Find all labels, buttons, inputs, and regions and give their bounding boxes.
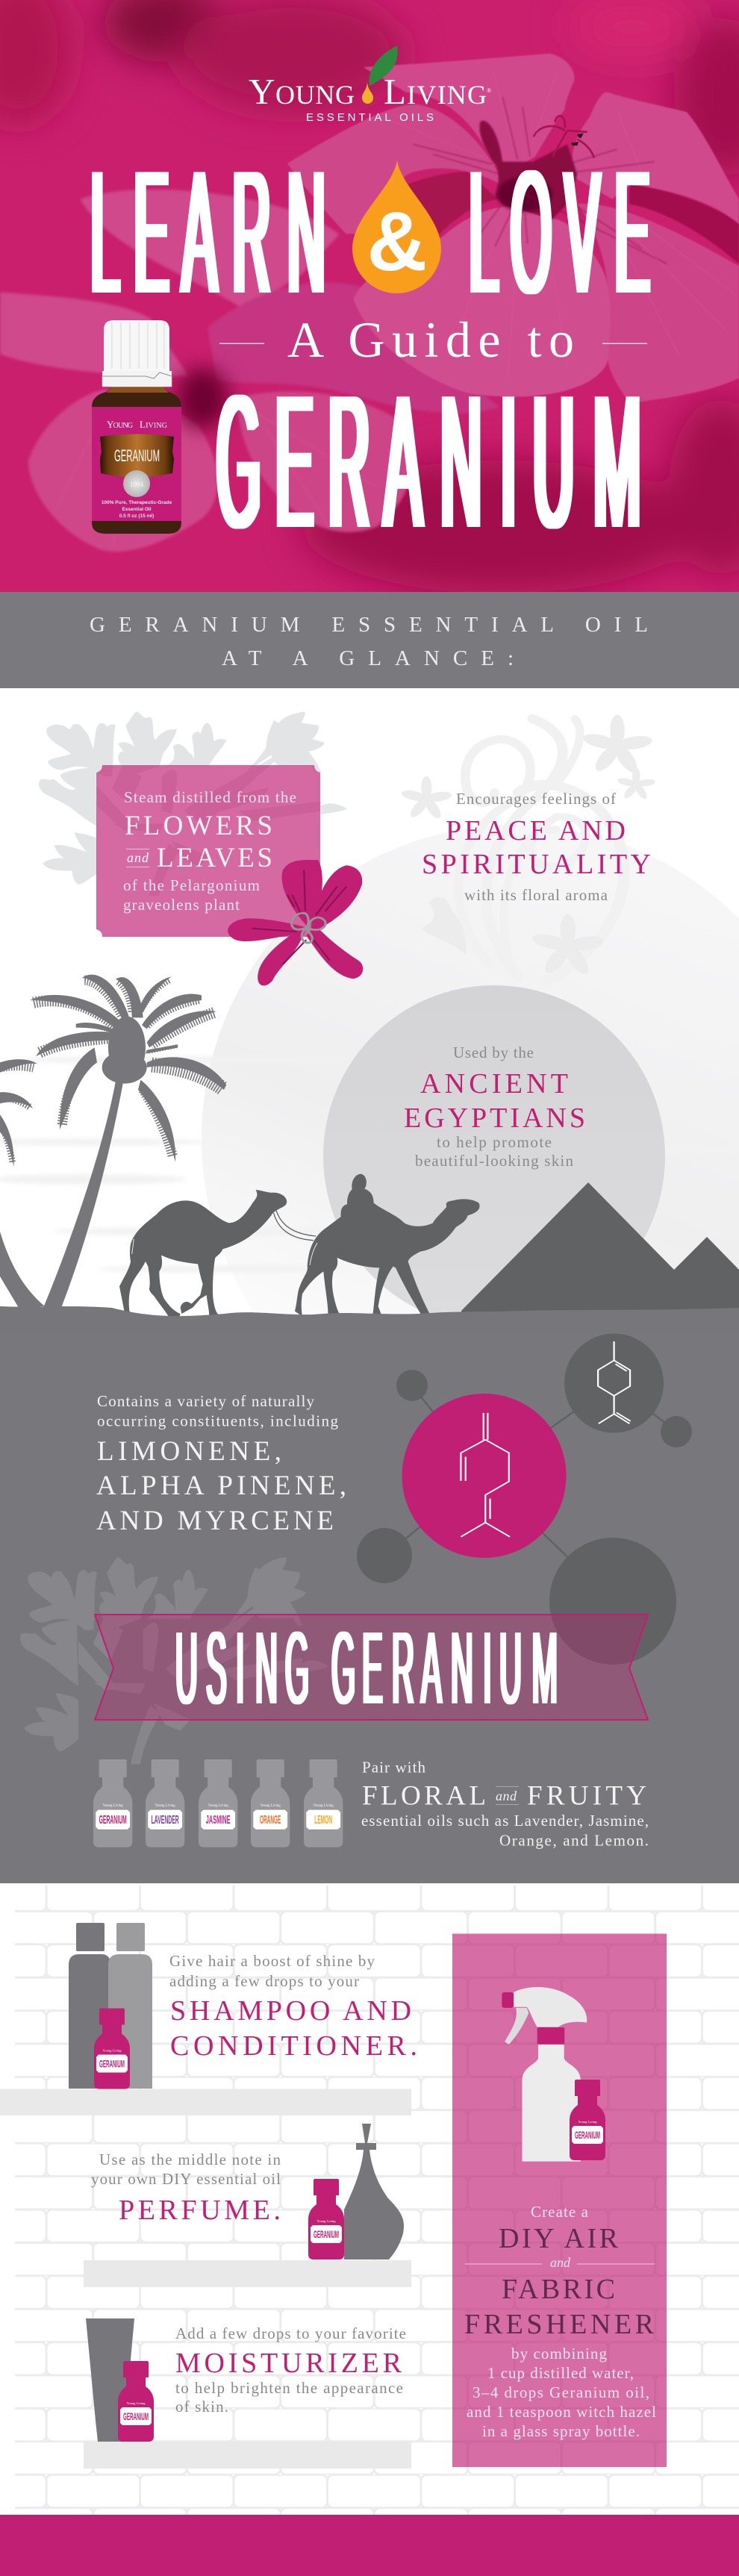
desert ground <box>0 1306 739 1336</box>
decorative: geranium leaves behind the box <box>39 711 347 896</box>
panel: DIY air and fabric freshener: FRESHENER <box>464 2309 655 2340</box>
bottle: lavender <box>146 1759 184 1847</box>
text: constituents: AND MYRCENE <box>96 1506 334 1536</box>
icon: moisturizer tube and oil: GERANIUM <box>123 2410 149 2422</box>
title: Geranium: GERANIUM <box>216 355 640 567</box>
circle: ancient Egyptians: Used by the <box>453 1044 534 1061</box>
product bottle: Geranium essential oil: 0.5 fl oz (15 ml) <box>119 514 154 519</box>
product bottle: Geranium essential oil <box>92 320 181 534</box>
panel: DIY air and fabric freshener: and 1 teaspoon witch hazel <box>467 2403 656 2421</box>
background: cloud streaks <box>0 1056 739 1273</box>
camel, front with rider <box>295 1174 479 1320</box>
text: shampoo and conditioner: adding a few drops to your <box>169 1972 359 1990</box>
banner: using geranium: USING GERANIUM <box>175 1610 558 1726</box>
decorative: aroma swirl and small flowers <box>400 715 656 981</box>
text: peace and spirituality: SPIRITUALITY <box>422 849 651 880</box>
background: white brick wall <box>15 1886 739 2515</box>
footer bar <box>0 2515 739 2576</box>
icon: moisturizer tube and oil <box>86 2318 154 2442</box>
bottle: lavender: LAVENDER <box>152 1814 179 1827</box>
subtitle: A Guide to: A Guide to <box>287 311 574 368</box>
camel reins <box>274 1211 316 1241</box>
icon: gold drop <box>362 82 373 104</box>
panel: DIY air and fabric freshener: by combining <box>511 2345 608 2363</box>
text: shampoo and conditioner: CONDITIONER. <box>170 2030 417 2062</box>
bottle: lemon <box>304 1759 343 1847</box>
camel, rear <box>119 1190 287 1319</box>
oil bottle: GERANIUM <box>99 2057 125 2069</box>
text: floral and fruity: FRUITY <box>527 1781 646 1811</box>
banner: using geranium <box>95 1610 648 1726</box>
panel: flowers and leaves <box>96 765 320 937</box>
panel: flowers and leaves: and <box>127 850 149 865</box>
text: floral and fruity: and <box>496 1788 517 1803</box>
text: floral and fruity: FLORAL <box>362 1781 486 1811</box>
circle: ancient Egyptians <box>323 985 665 1327</box>
section header bar: at a glance: AT A GLANCE: <box>222 646 514 670</box>
hero: blurred pink flower photo <box>0 0 739 593</box>
panel: flowers and leaves: graveolens plant <box>123 896 240 914</box>
product bottle: Geranium essential oil: Essential Oil <box>122 507 152 512</box>
scene: camels and ground <box>0 1174 739 1336</box>
title: Learn & Love: LEARN <box>90 134 325 330</box>
chart: molecule diagram <box>357 1333 692 1665</box>
text: peace and spirituality: Encourages feelings of <box>456 790 616 808</box>
panel: DIY air and fabric freshener <box>452 1933 667 2467</box>
panel: DIY air and fabric freshener: FABRIC <box>502 2274 615 2305</box>
circle: ancient Egyptians: to help promote <box>437 1133 552 1151</box>
icon: green leaf <box>369 46 398 86</box>
bottle: lavender: Young Living <box>155 1804 175 1808</box>
logo: Young Living <box>249 46 491 124</box>
text: perfume <box>91 2151 281 2226</box>
bottle: geranium: Young Living <box>103 1804 123 1808</box>
text: constituents: ALPHA PINENE, <box>96 1471 346 1501</box>
icon: perfume bottle and oil: GERANIUM <box>314 2228 339 2240</box>
text: moisturizer: to help brighten the appearance <box>175 2379 403 2397</box>
panel: flowers and leaves: FLOWERS <box>125 811 272 841</box>
logo: Young Living: ® <box>487 87 491 94</box>
logo: Young Living: YOUNG <box>249 71 355 112</box>
text: shampoo and conditioner: SHAMPOO AND <box>170 1995 411 2027</box>
panel: flowers and leaves: of the Pelargonium <box>123 876 260 894</box>
text: moisturizer: MOISTURIZER <box>175 2348 402 2379</box>
text: perfume: Use as the middle note in <box>99 2151 281 2168</box>
text: peace and spirituality <box>422 790 651 904</box>
background: big pale sun circle <box>202 825 739 1452</box>
panel: DIY air and fabric freshener: and <box>550 2255 571 2270</box>
bottle: jasmine: Young Living <box>208 1804 228 1808</box>
title: Learn & Love <box>90 134 650 330</box>
product bottle: Geranium essential oil: GERANIUM <box>114 446 160 465</box>
text: perfume: PERFUME. <box>119 2195 281 2226</box>
product bottle: Geranium essential oil: YOUNG <box>107 419 133 430</box>
section header bar: at a glance <box>0 592 739 688</box>
text: perfume: your own DIY essential oil <box>91 2170 281 2188</box>
icon: orange drop with ampersand: & <box>367 195 427 288</box>
bottle row: paired oils <box>93 1759 343 1847</box>
panel: shelves <box>0 2089 411 2469</box>
panel: DIY air and fabric freshener: 3–4 drops Geranium oil, <box>473 2383 649 2401</box>
panel: DIY air and fabric freshener: in a glass spray bottle. <box>482 2422 640 2440</box>
icon: spray bottle: GERANIUM <box>575 2129 600 2141</box>
section: grey lower panel <box>0 1332 739 1883</box>
logo: Young Living: ESSENTIAL OILS <box>306 111 434 124</box>
icon: geranium flower <box>228 860 363 985</box>
bottle: jasmine <box>199 1759 237 1847</box>
text: moisturizer <box>175 2324 406 2416</box>
decorative: geranium leaves in grey panel <box>20 1557 328 1765</box>
panel: DIY air and fabric freshener: Create a <box>531 2203 589 2221</box>
bottle: jasmine: JASMINE <box>206 1814 231 1827</box>
bottle: orange: Young Living <box>261 1804 281 1808</box>
icon: perfume bottle and oil <box>308 2124 404 2260</box>
text: constituents: Contains a variety of naturally <box>97 1392 315 1410</box>
text: moisturizer: Add a few drops to your favorite <box>175 2324 406 2342</box>
icon: perfume bottle and oil: Young Living <box>317 2219 336 2223</box>
title: Learn & Love: LOVE <box>470 134 650 330</box>
flower, upper right <box>287 54 739 403</box>
text: peace and spirituality: PEACE AND <box>446 815 626 846</box>
text: floral and fruity: Pair with <box>362 1759 425 1777</box>
text: constituents <box>96 1392 346 1536</box>
bottle: geranium: GERANIUM <box>99 1814 127 1827</box>
oil bottle <box>94 2008 130 2089</box>
logo: Young Living: LIVING <box>384 71 487 112</box>
bottle: orange <box>251 1759 290 1847</box>
scene: palm tree, small left <box>0 1059 45 1308</box>
icon: orange drop with ampersand <box>352 160 441 293</box>
panel: DIY air and fabric freshener: DIY AIR <box>499 2223 619 2254</box>
circle: ancient Egyptians: beautiful-looking skin <box>415 1152 573 1170</box>
text: floral and fruity: essential oils such as Lavender, Jasmine, <box>361 1812 649 1830</box>
section header bar: at a glance: GERANIUM ESSENTIAL OIL <box>90 613 648 637</box>
text: floral and fruity: Orange, and Lemon. <box>499 1832 649 1850</box>
product bottle: Geranium essential oil: 1994 <box>130 481 143 488</box>
bottle: lemon: LEMON <box>314 1814 332 1827</box>
text: shampoo and conditioner: Give hair a boost of shine by <box>169 1952 375 1970</box>
bottle: geranium <box>93 1759 132 1847</box>
bottle: orange: ORANGE <box>260 1814 281 1827</box>
icon: moisturizer tube and oil: Young Living <box>127 2401 146 2405</box>
scene: pyramids <box>461 1182 739 1321</box>
oil bottle: Young Living <box>103 2048 122 2053</box>
text: peace and spirituality: with its floral aroma <box>464 886 608 904</box>
text: floral and fruity <box>361 1759 649 1850</box>
bottle: lemon: Young Living <box>314 1804 334 1808</box>
icon: spray bottle <box>502 1987 605 2162</box>
text: moisturizer: of skin. <box>175 2398 228 2416</box>
circle: ancient Egyptians: EGYPTIANS <box>404 1103 585 1134</box>
product bottle: Geranium essential oil: 100% Pure, Therapeutic-Grade <box>102 500 172 505</box>
scene: palm tree, large <box>30 975 226 1308</box>
product bottle: Geranium essential oil: LIVING <box>140 419 167 430</box>
panel: flowers and leaves: Steam distilled from the <box>124 788 296 806</box>
panel: flowers and leaves: LEAVES <box>157 843 272 873</box>
panel: DIY air and fabric freshener: 1 cup distilled water, <box>487 2364 634 2382</box>
text: constituents: occurring constituents, including <box>97 1412 339 1430</box>
text: shampoo and conditioner <box>169 1952 417 2062</box>
text: constituents: LIMONENE, <box>97 1436 281 1467</box>
icon: shampoo and conditioner bottles <box>69 1923 152 2089</box>
icon: spray bottle: Young Living <box>579 2120 597 2124</box>
circle: ancient Egyptians: ANCIENT <box>420 1068 568 1100</box>
